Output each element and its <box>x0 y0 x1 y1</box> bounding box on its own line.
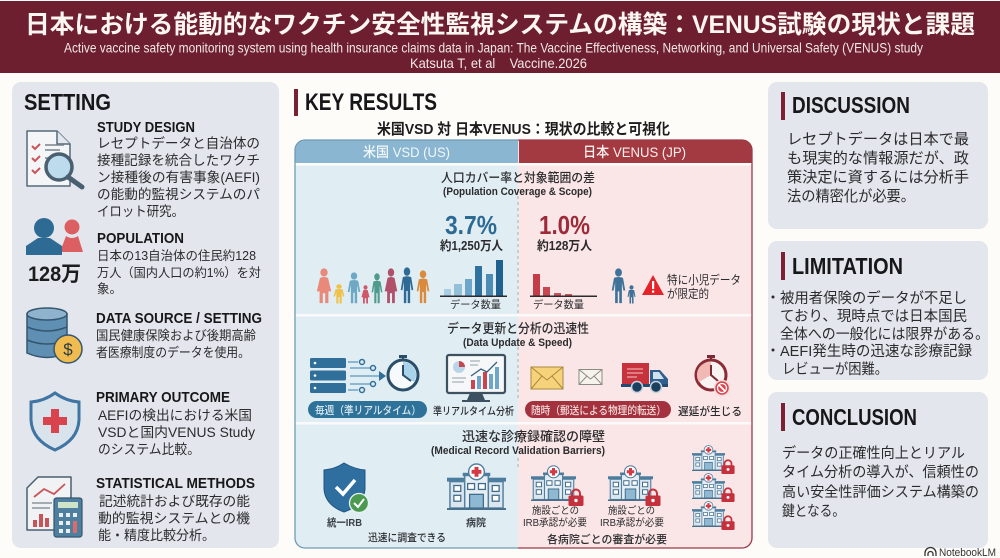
block: statistical methods: 動的監視システムとの機 <box>98 511 251 526</box>
bar chart: JP data volume <box>530 274 597 311</box>
stat: JP coverage <box>537 210 592 253</box>
block: primary outcome: VSDと国内VENUS Study <box>98 425 255 440</box>
block: study design: ン接種後の有害事象(AEFI) <box>97 170 260 185</box>
icon: warning triangle <box>642 275 664 295</box>
icon: population people <box>26 218 83 255</box>
panel: conclusion <box>768 392 988 548</box>
block: study design: イロット研究。 <box>97 203 184 219</box>
stat: US coverage <box>440 210 503 253</box>
icon: shield with cross <box>31 393 79 450</box>
row: population coverage: 人口カバー率と対象範囲の差 <box>441 170 595 185</box>
row: medical record validation: (Medical Record Validation Barriers) <box>431 445 605 457</box>
stat: 128万: 128万 <box>28 263 81 286</box>
panel: limitation: AEFI発生時の迅速な診療記録 <box>780 343 972 360</box>
block: data source: 者医療制度のデータを使用。 <box>96 345 250 360</box>
panel: discussion <box>768 82 988 229</box>
row: data update and speed: データ更新と分析の迅速性 <box>447 321 589 336</box>
callout: limited pediatric data: が限定的 <box>667 286 709 301</box>
icon: parent and child <box>612 268 636 304</box>
label: rapid investigation: 迅速に調査できる <box>368 531 446 544</box>
block: population: 万人（国内人口の約1%）を対 <box>97 265 261 280</box>
title: 日本における能動的なワクチン安全性監視システムの構築：VENUS試験の現状と課題 <box>25 11 975 39</box>
row: population coverage: (Population Coverage & Scope) <box>443 186 592 198</box>
icon: hospital <box>447 464 506 510</box>
heading: setting: SETTING <box>24 89 111 115</box>
icon: document with magnifier <box>27 131 82 187</box>
block: primary outcome: AEFIの検出における米国 <box>98 408 252 423</box>
block: primary outcome <box>96 389 255 457</box>
panel: limitation: 被用者保険のデータが不足し <box>780 289 967 307</box>
label: unified IRB: 統一IRB <box>327 516 362 529</box>
block: primary outcome: PRIMARY OUTCOME <box>96 389 230 406</box>
pill: weekly near real time <box>308 401 427 418</box>
row: population coverage <box>317 170 741 311</box>
block: statistical methods <box>96 475 255 543</box>
callout: limited pediatric data <box>667 272 741 301</box>
pill: weekly near real time: 毎週（準リアルタイム） <box>315 403 421 417</box>
icon: stacked locked hospitals <box>692 446 735 530</box>
block: study design <box>97 119 260 219</box>
panel: setting <box>12 82 279 548</box>
icon: database with coin: $ <box>63 340 73 359</box>
stat: JP coverage: 約128万人 <box>537 238 592 253</box>
block: data source: 国民健康保険および後期高齢 <box>96 328 256 343</box>
label: delays occur: 遅延が生じる <box>678 404 742 418</box>
block: population: POPULATION <box>97 230 184 247</box>
header band <box>0 1 1000 73</box>
block: population: 象。 <box>97 282 122 296</box>
icon: unified IRB shield <box>324 463 368 512</box>
panel: limitation: LIMITATION <box>792 253 903 279</box>
heading: key results: KEY RESULTS <box>305 89 437 116</box>
callout: limited pediatric data: 特に小児データ <box>667 272 741 287</box>
block: statistical methods: 能・精度比較分析。 <box>98 528 215 543</box>
label: per-hospital review: 各病院ごとの審査が必要 <box>547 532 667 546</box>
row: data update and speed: (Data Update & Speed) <box>463 337 572 349</box>
pill: ad hoc postal transfer <box>525 401 671 418</box>
panel: limitation: レビューが困難。 <box>782 361 888 378</box>
row: medical record validation: 迅速な診療録確認の障壁 <box>462 429 605 444</box>
label: IRB needed per facility 1: IRB承認が必要 <box>523 516 587 529</box>
panel: limitation: 全体への一般化には限界がある。 <box>780 326 989 343</box>
block: primary outcome: のシステム比較。 <box>98 442 200 457</box>
block: study design: STUDY DESIGN <box>97 119 195 136</box>
stat: US coverage: 約1,250万人 <box>440 238 503 253</box>
bar chart: JP data volume: データ数量 <box>533 298 584 311</box>
panel: key results <box>294 89 752 548</box>
block: study design: 接種記録を統合したワクチ <box>97 153 260 168</box>
panel: discussion: 策決定に資するには分析手 <box>787 169 969 186</box>
panel: conclusion: 鍵となる。 <box>782 503 845 520</box>
block: data source: DATA SOURCE / SETTING <box>96 310 262 327</box>
icon: large envelope <box>531 367 563 389</box>
panel: discussion: 法の精密化が必要。 <box>787 188 915 205</box>
block: population <box>97 230 261 296</box>
icon: blue stopwatch <box>388 355 418 390</box>
stat: JP coverage: 1.0% <box>539 210 590 240</box>
label: near real time analysis: 準リアルタイム分析 <box>433 404 514 418</box>
icon: small envelope <box>579 370 602 384</box>
citation: Katsuta T, et al Vaccine.2026 <box>410 55 587 71</box>
block: statistical methods: STATISTICAL METHODS <box>96 475 255 492</box>
panel: discussion: も現実的な情報源だが、政 <box>787 150 969 167</box>
panel: conclusion: 高い安全性評価システム構築の <box>782 483 979 501</box>
block: statistical methods: 記述統計および既存の能 <box>99 494 251 509</box>
block: study design: の能動的監視システムのパ <box>97 187 260 202</box>
label: IRB needed per facility 2 <box>600 504 664 529</box>
column header: JP: 日本 VENUS (JP) <box>583 144 686 160</box>
panel: discussion: DISCUSSION <box>792 92 910 118</box>
pill: ad hoc postal transfer: 随時（郵送による物理的転送） <box>531 403 666 417</box>
row: medical record validation <box>324 429 735 546</box>
column header: US: 米国 VSD (US) <box>363 144 450 160</box>
icon: database with coin <box>27 308 82 363</box>
panel: limitation: ており、現時点では日本国民 <box>780 308 967 325</box>
icon: statistics with calculator <box>27 477 82 537</box>
icon: red stopwatch with delay <box>696 355 730 396</box>
icon: locked hospital 2 <box>608 466 660 506</box>
stat: US coverage: 3.7% <box>445 210 497 240</box>
icon: delivery truck <box>621 363 668 392</box>
label: IRB needed per facility 1: 施設ごとの <box>532 504 579 517</box>
block: study design: レセプトデータと自治体の <box>97 135 260 151</box>
icon: family group <box>317 267 429 304</box>
panel: conclusion: データの正確性向上とリアル <box>782 444 965 462</box>
row: data update and speed <box>308 321 742 418</box>
block: population: 日本の13自治体の住民約128 <box>97 248 256 263</box>
panel: conclusion: タイム分析の導入が、信頼性の <box>782 464 979 481</box>
label: hospital: 病院 <box>466 516 486 529</box>
panel: conclusion: CONCLUSION <box>792 404 917 430</box>
label: IRB needed per facility 2: 施設ごとの <box>608 504 655 517</box>
label: IRB needed per facility 2: IRB承認が必要 <box>600 516 664 529</box>
bar chart: US data volume <box>440 260 507 311</box>
icon: locked hospital 1 <box>531 466 584 506</box>
icon: analytics monitor <box>447 355 505 402</box>
bar chart: US data volume: データ数量 <box>450 298 501 311</box>
icon: servers with arrows <box>310 358 386 393</box>
comparison heading: 米国VSD 対 日本VENUS：現状の比較と可視化 <box>377 120 670 138</box>
block: data source <box>96 310 262 360</box>
label: IRB needed per facility 1 <box>523 504 587 529</box>
panel: discussion: レセプトデータは日本で最 <box>787 130 969 148</box>
panel: limitation <box>768 241 989 380</box>
comparison table <box>295 140 752 548</box>
